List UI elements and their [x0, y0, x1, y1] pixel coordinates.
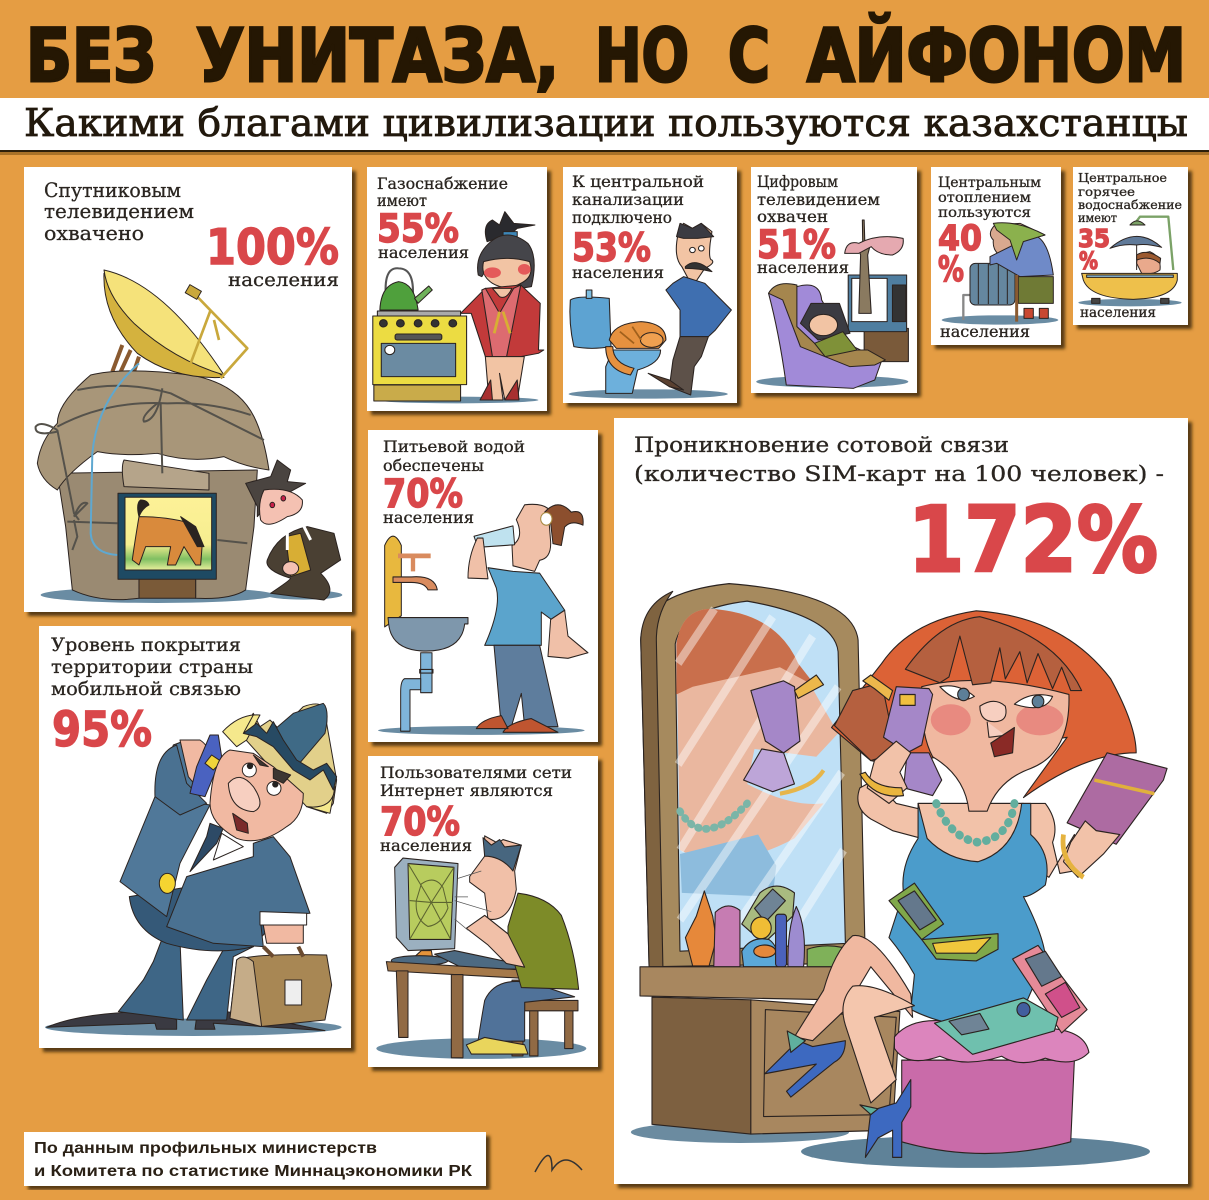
- illustration: yurt with satellite dish and TV: [36, 270, 342, 603]
- source box: По данным профильных министерств: [34, 1140, 377, 1157]
- number: 51%: 51%: [757, 223, 836, 268]
- text: water heading: [383, 437, 525, 475]
- text: population label: населения: [228, 269, 339, 291]
- panel: internet: [368, 756, 598, 1067]
- text: coverage heading: мобильной связью: [51, 678, 241, 700]
- illustrations: woman with stove, man with toilet and cat, boy with TV: [373, 212, 908, 403]
- text: satellite heading: охвачено: [44, 221, 144, 245]
- text: coverage heading: Уровень покрытия: [51, 634, 241, 656]
- text: population label: населения: [1080, 305, 1156, 321]
- phones on lap: [889, 883, 1087, 1054]
- illustration: man at computer: [376, 836, 586, 1059]
- text: internet heading: Пользователями сети: [380, 763, 572, 782]
- text: satellite heading: телевидением: [44, 199, 194, 223]
- number: 95%: 95%: [52, 702, 152, 758]
- text: gas heading: [377, 174, 508, 210]
- number: 172%: 172%: [908, 488, 1158, 593]
- text: coverage heading: [51, 634, 253, 700]
- number: 35%: [1078, 224, 1110, 275]
- source box: и Комитета по статистике Миннацэкономики РК: [34, 1163, 472, 1180]
- panel: central heating: [931, 167, 1061, 345]
- text: population label: населения: [572, 263, 664, 282]
- illustration: armchair, boy, TV tower: [756, 220, 908, 388]
- number: 53%: 53%: [572, 226, 651, 271]
- text: sewerage heading: К центральной: [572, 172, 704, 191]
- panel: drinking water: [368, 430, 598, 742]
- panel: sewerage: [563, 167, 737, 403]
- text: hot water heading: [1078, 170, 1182, 225]
- text: sewerage heading: подключено: [572, 208, 672, 227]
- text: water heading: обеспечены: [383, 456, 484, 475]
- illustration: official with phone and briefcase: [45, 703, 342, 1036]
- text: SIM heading: Проникновение сотовой связи: [634, 433, 1009, 457]
- text: hot water heading: имеют: [1078, 210, 1117, 225]
- cosmetics: [685, 886, 842, 967]
- illustration: boy in bathtub with umbrella: [1078, 217, 1182, 306]
- text: population label: населения: [940, 323, 1030, 341]
- legs: [794, 935, 913, 1041]
- number: 70%: 70%: [380, 800, 460, 845]
- illustration: man drinking at sink: [378, 504, 588, 735]
- panel: satellite TV: [24, 167, 352, 612]
- text: heating heading: Центральным: [938, 175, 1041, 191]
- text: heating heading: отоплением: [938, 190, 1031, 206]
- text: satellite heading: Спутниковым: [44, 178, 181, 202]
- text: heating heading: [938, 175, 1041, 221]
- title: НО: [595, 14, 689, 99]
- number: 40%: [938, 219, 982, 290]
- panel: gas supply: [367, 167, 547, 411]
- subtitle band: Какими благами цивилизации пользуются казахстанцы: [24, 101, 1188, 145]
- text: satellite heading: [44, 178, 194, 245]
- text: coverage heading: территории страны: [51, 656, 253, 678]
- source box: [24, 1132, 486, 1186]
- pouf: [894, 1021, 1089, 1154]
- text: sewerage heading: [572, 172, 704, 227]
- text: heating heading: пользуются: [938, 205, 1031, 221]
- text: SIM heading: (количество SIM-карт на 100 человек) -: [634, 462, 1164, 486]
- text: sewerage heading: канализации: [572, 190, 684, 209]
- text: population label: населения: [383, 508, 474, 527]
- number: 35%: %: [1079, 247, 1098, 275]
- text: internet heading: [380, 763, 572, 800]
- text: internet heading: Интернет являются: [380, 781, 553, 800]
- number: 40%: %: [938, 250, 964, 290]
- title: С: [728, 14, 770, 99]
- text: digital TV heading: Цифровым: [757, 172, 838, 191]
- number: 35%: 35: [1078, 224, 1110, 253]
- text: population label: населения: [380, 836, 472, 855]
- text: gas heading: имеют: [377, 191, 427, 210]
- text: water heading: Питьевой водой: [383, 437, 525, 456]
- panel: hot water: [1073, 167, 1188, 325]
- text: digital TV heading: телевидением: [757, 190, 880, 209]
- panel: digital TV: [751, 167, 917, 393]
- text: hot water heading: горячее: [1078, 184, 1135, 199]
- title: УНИТАЗА,: [196, 14, 559, 99]
- text: hot water heading: водоснабжение: [1078, 197, 1182, 212]
- illustration: stove and woman: [373, 212, 544, 403]
- title: [26, 13, 1186, 99]
- number: 70%: 70%: [383, 472, 463, 517]
- text: population label: населения: [378, 243, 469, 262]
- signature: [535, 1155, 582, 1172]
- text: SIM heading: [634, 433, 1164, 486]
- panel: SIM penetration: [614, 418, 1188, 1184]
- number: 40%: 40: [938, 219, 982, 259]
- title: БЕЗ: [26, 14, 156, 99]
- dressing table: [640, 967, 900, 1134]
- mirror: [641, 584, 865, 967]
- text: digital TV heading: охвачен: [757, 207, 828, 226]
- text: population label: населения: [757, 258, 849, 277]
- text: hot water heading: Центральное: [1078, 170, 1167, 185]
- illustration: toilet, cat, man: [569, 223, 731, 399]
- text: gas heading: Газоснабжение: [377, 174, 508, 193]
- woman: [765, 611, 1167, 1157]
- illustration: woman with phones at mirror: [631, 584, 1167, 1168]
- panel: mobile coverage: [39, 626, 351, 1048]
- illustration: grandmother with radiator: [942, 223, 1058, 325]
- number: 100%: 100%: [206, 219, 339, 276]
- text: digital TV heading: [757, 172, 880, 226]
- number: 55%: 55%: [377, 207, 459, 252]
